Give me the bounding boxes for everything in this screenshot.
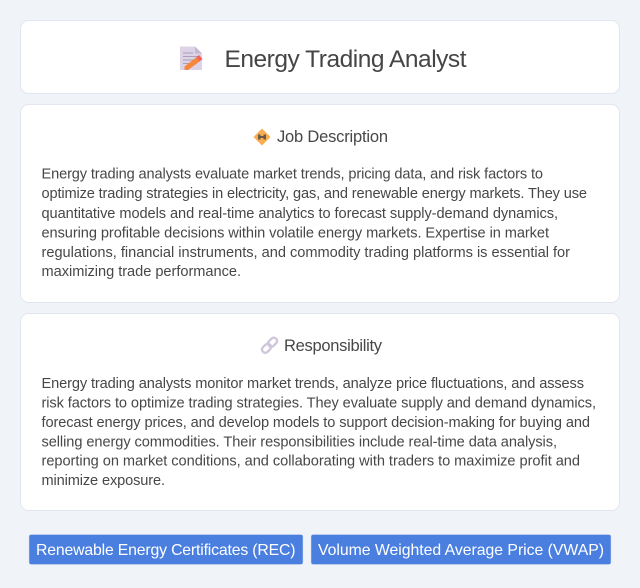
tag: renewable energy certificates bbox=[29, 534, 303, 564]
icon: orange diamond bbox=[254, 128, 270, 146]
text block: job description: quantitative models and real-time analytics to forecast supply-demand dynamics, bbox=[42, 206, 558, 222]
heading: responsibility: Responsibility bbox=[284, 337, 383, 355]
heading: job description: Job Description bbox=[277, 128, 388, 146]
text block: responsibility: Energy trading analysts monitor market trends, analyze price fluctuations, and assess bbox=[42, 376, 584, 392]
tag: volume weighted average price bbox=[311, 534, 611, 564]
text block: job description: regulations, financial instruments, and commodity trading platforms is essential for bbox=[42, 245, 570, 261]
tag: renewable energy certificates: Renewable Energy Certificates (REC) bbox=[36, 542, 296, 559]
panel: job description bbox=[20, 104, 620, 302]
text block: responsibility: forecast energy prices, and develop models to support decision-making for buying and bbox=[42, 415, 590, 431]
text block: job description: optimize trading strategies in electricity, gas, and renewable energy markets. They use bbox=[42, 186, 587, 202]
tag: volume weighted average price: Volume Weighted Average Price (VWAP) bbox=[318, 542, 604, 559]
icon: chain link bbox=[261, 336, 278, 354]
icon: document with pencil bbox=[180, 46, 202, 70]
text block: responsibility: reporting on market conditions, and collaborating with traders to maximize profit and bbox=[42, 454, 580, 470]
panel: title card bbox=[20, 20, 620, 94]
text block: responsibility: minimize exposure. bbox=[42, 473, 165, 489]
text block: responsibility: selling energy commodities. Their responsibilities include real-time data analysis, bbox=[42, 434, 557, 450]
text block: job description bbox=[42, 166, 587, 280]
text block: job description: ensuring profitable decisions within volatile energy markets. Expertise in market bbox=[42, 225, 549, 241]
text block: responsibility bbox=[42, 376, 596, 489]
text block: job description: maximizing trade performance. bbox=[42, 264, 241, 280]
text block: responsibility: risk factors to optimize trading strategies. They evaluate supply and demand dynamics, bbox=[42, 395, 596, 411]
title: Energy Trading Analyst bbox=[224, 46, 467, 73]
panel: responsibility bbox=[20, 314, 620, 510]
text block: job description: Energy trading analysts evaluate market trends, pricing data, and risk factors to bbox=[42, 166, 543, 182]
